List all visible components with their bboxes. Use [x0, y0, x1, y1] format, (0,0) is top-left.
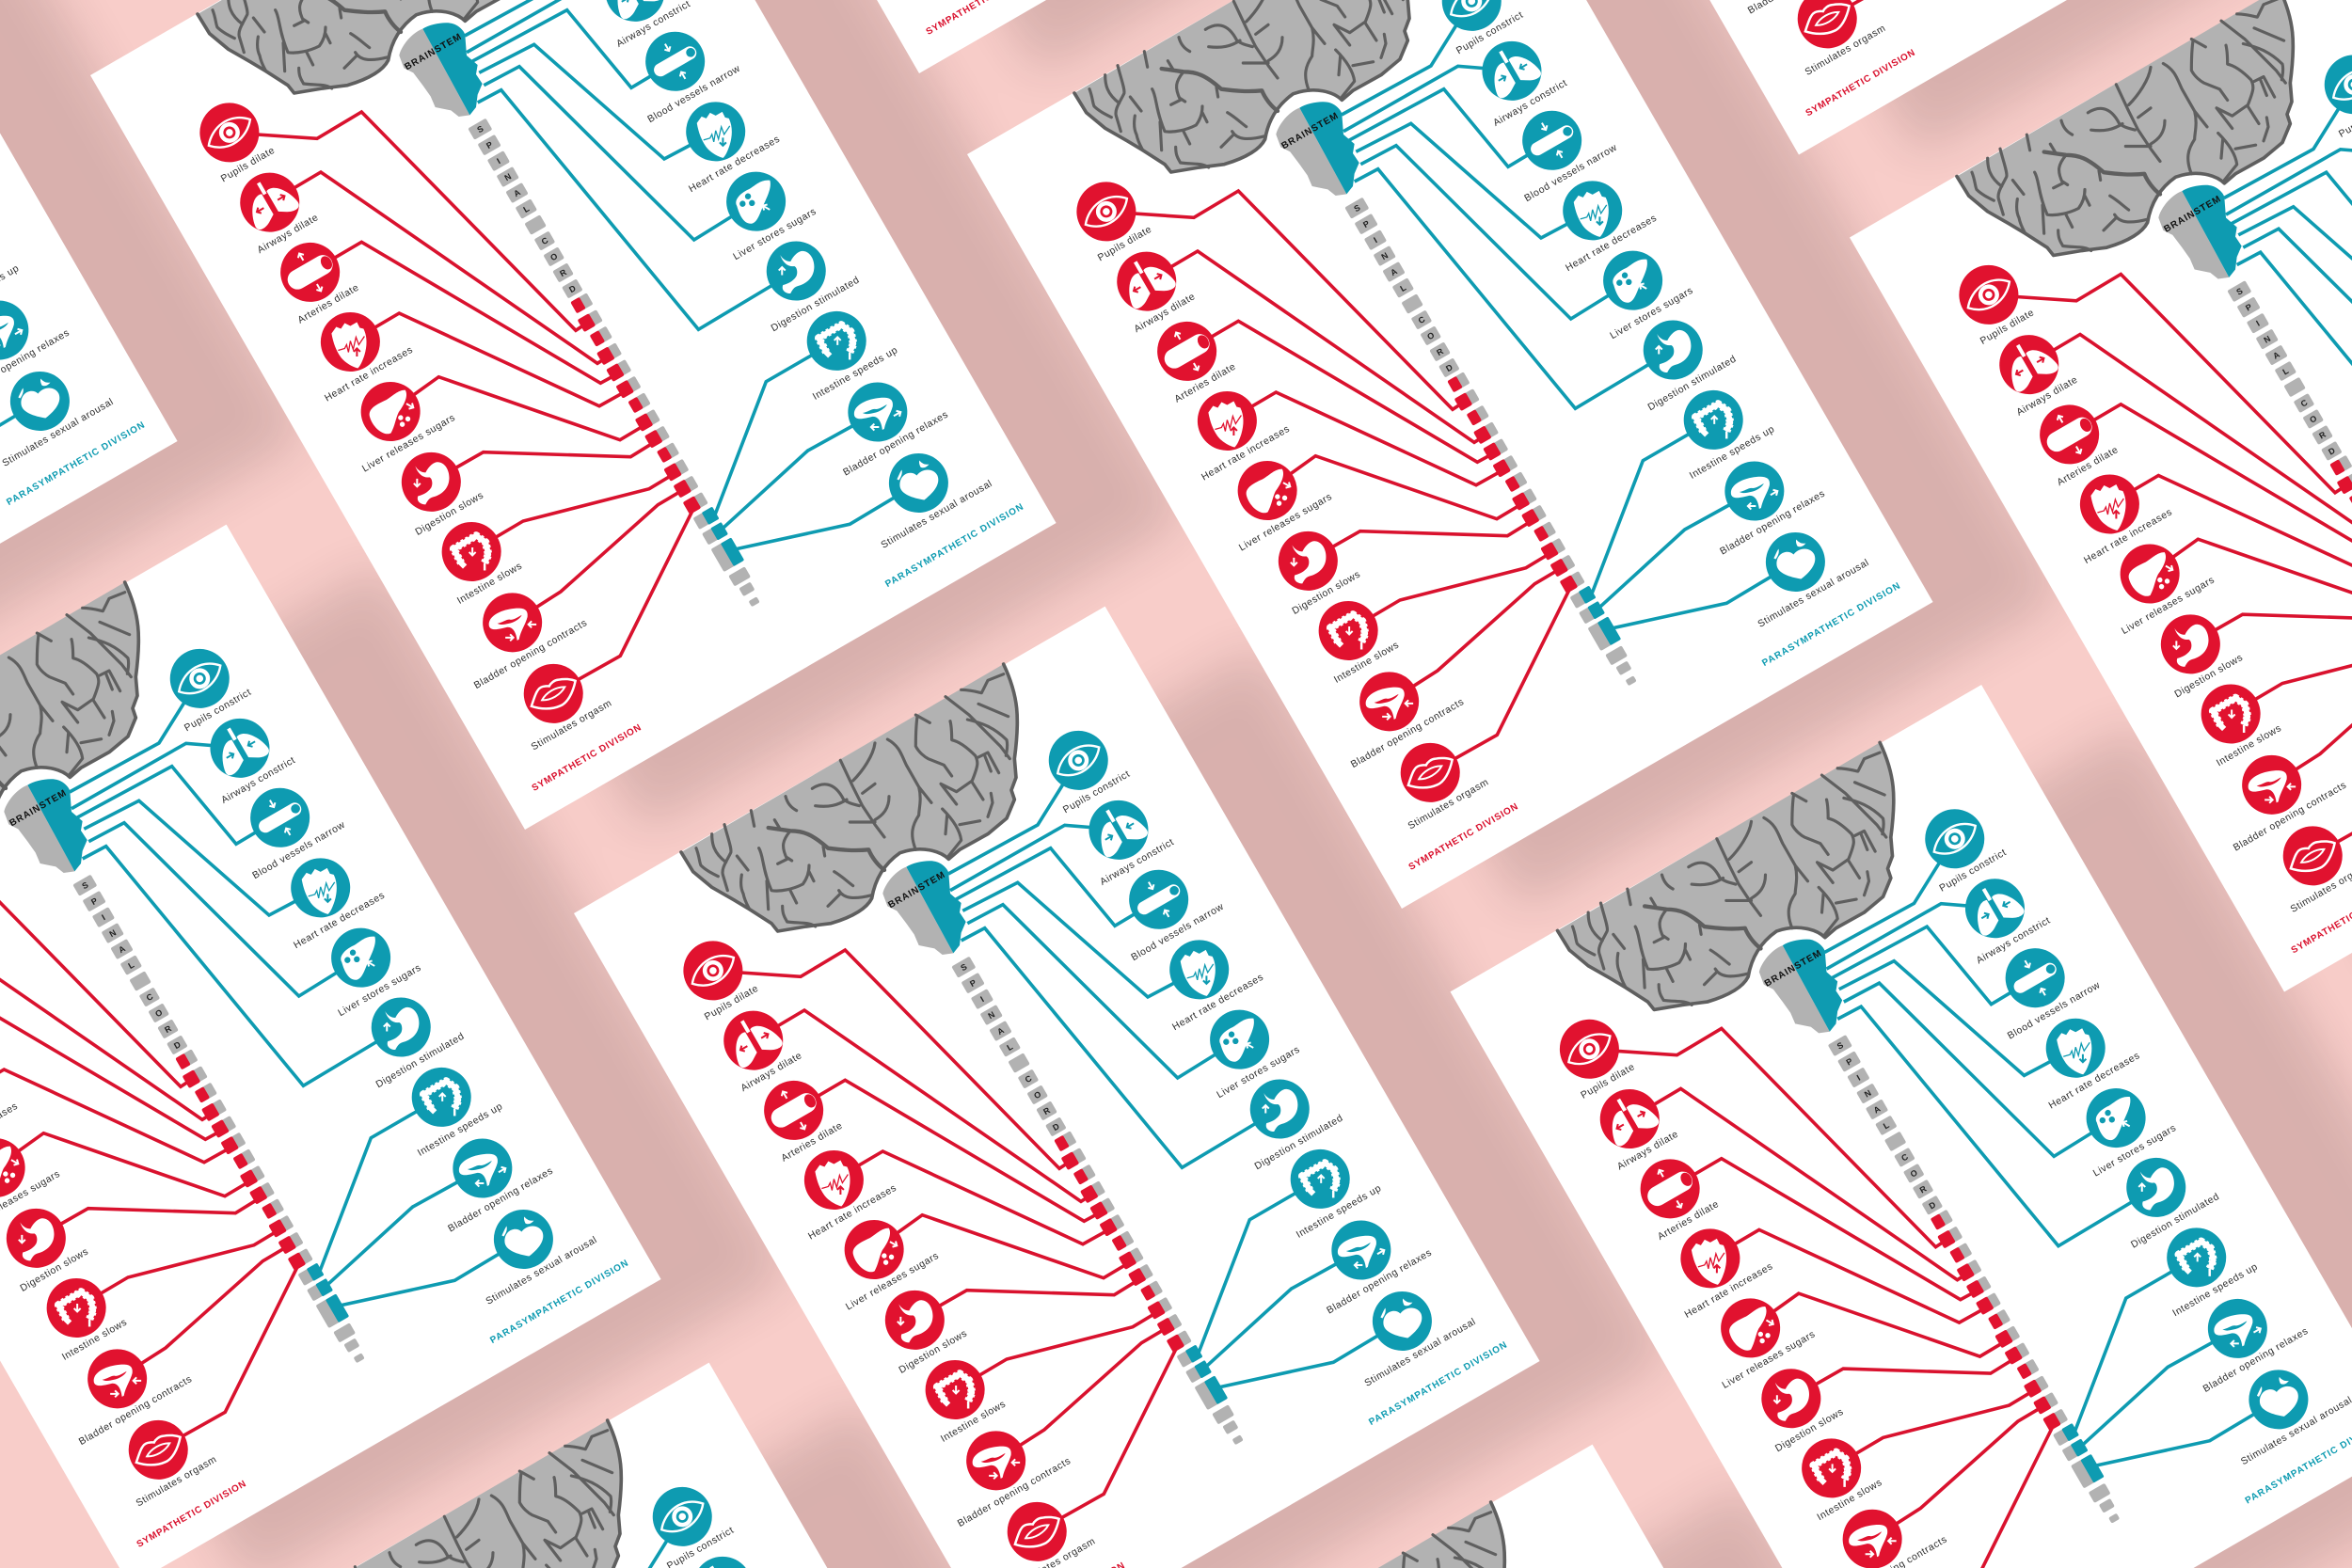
icon: heart rate increases: [793, 1139, 875, 1222]
parasympathetic labels: [1039, 755, 1478, 1389]
poster labels: Intestine slows: [60, 1316, 129, 1363]
poster labels: P: [89, 896, 99, 907]
brain illustration: [681, 664, 1017, 955]
parasympathetic heading: PARASYMPATHETIC DIVISION: [1367, 1339, 1510, 1428]
poster labels: S: [2234, 286, 2245, 297]
poster labels: Heart rate decreases: [687, 134, 782, 195]
poster labels: Digestion stimulated: [770, 275, 862, 334]
sympathetic nerve lines: [713, 950, 1180, 1531]
poster labels: R: [1918, 1183, 1929, 1195]
icon: heart rate decreases: [1159, 929, 1240, 1011]
poster labels: L: [2281, 366, 2291, 376]
poster labels: Pupils dilate: [1979, 307, 2036, 347]
poster labels: Airways constrict: [1491, 77, 1569, 129]
poster labels: A: [1872, 1103, 1883, 1116]
poster labels: Intestine speeds up: [811, 344, 900, 403]
poster labels: Intestine speeds up: [416, 1101, 505, 1159]
poster labels: Heart rate increases: [323, 344, 415, 404]
poster labels: N: [108, 927, 118, 939]
poster labels: Airways dilate: [255, 212, 321, 256]
poster labels: Arteries dilate: [1172, 361, 1238, 405]
icon: blood vessels narrow: [1119, 859, 1200, 940]
poster labels: PARASYMPATHETIC DIVISION: [5, 420, 148, 508]
poster labels: Digestion slows: [1290, 568, 1362, 617]
poster labels: S: [475, 124, 485, 135]
poster labels: Pupils dilate: [1096, 224, 1153, 263]
sympathetic labels: Airways dilate: [739, 1050, 804, 1094]
poster: top sliver: [485, 0, 1451, 73]
poster: top-left sliver: [0, 0, 178, 748]
spinal cord letters: L: [1006, 1041, 1015, 1053]
poster labels: Airways dilate: [1615, 1129, 1680, 1173]
parasympathetic labels: Blood vessels narrow: [1129, 901, 1226, 963]
poster labels: SYMPATHETIC DIVISION: [1804, 47, 1917, 119]
poster labels: S: [1352, 203, 1362, 214]
poster labels: Bladder opening contracts: [2232, 780, 2348, 853]
spinal cord letters: C: [1024, 1073, 1034, 1085]
parasympathetic labels: Bladder opening relaxes: [1325, 1246, 1434, 1316]
poster: centre labels: [670, 744, 1510, 1568]
poster labels: Digestion slows: [1773, 1406, 1846, 1454]
icon: stimulates orgasm: [996, 1491, 1077, 1568]
icon: bladder opening relaxes: [1321, 1210, 1402, 1291]
poster: lower right: [1451, 685, 2352, 1568]
icon: arteries dilate: [754, 1069, 834, 1150]
poster labels: SYMPATHETIC DIVISION: [135, 1479, 248, 1550]
poster labels: [1946, 88, 2352, 956]
poster labels: Stimulates orgasm: [135, 1453, 219, 1509]
parasympathetic labels: Liver stores sugars: [1215, 1044, 1302, 1101]
spinal cord letters: A: [995, 1025, 1006, 1037]
poster labels: Bladder opening relaxes: [1718, 487, 1827, 557]
poster labels: Digestion slows: [2172, 652, 2245, 700]
poster: centre artwork: [574, 607, 1540, 1568]
poster labels: Pupils constrict: [183, 687, 253, 734]
spinal teal segments: [1185, 1344, 1228, 1405]
parasympathetic icon column: [1038, 720, 1442, 1361]
poster labels: O: [548, 251, 559, 262]
poster labels: Liver releases sugars: [1720, 1328, 1818, 1391]
parasympathetic labels: Pupils constrict: [1061, 768, 1132, 816]
spinal red segments: [1052, 1135, 1184, 1353]
poster labels: O: [153, 1007, 164, 1019]
sympathetic labels: Digestion slows: [897, 1327, 969, 1376]
poster artwork: [1451, 685, 2352, 1568]
poster labels: P: [2244, 302, 2253, 313]
poster artwork: [178, 1363, 1144, 1568]
poster artwork: [0, 525, 661, 1568]
poster artwork: [1364, 0, 2330, 154]
parasympathetic nerve lines: [948, 760, 1403, 1387]
poster labels: Heart rate decreases: [1564, 213, 1659, 274]
poster labels: A: [1389, 266, 1399, 277]
poster labels: C: [1899, 1151, 1910, 1164]
poster artwork: [485, 0, 1451, 73]
poster labels: PARASYMPATHETIC DIVISION: [1760, 580, 1903, 669]
poster labels: Liver stores sugars: [731, 206, 818, 262]
poster labels: Digestion stimulated: [2129, 1191, 2221, 1251]
poster labels: L: [1882, 1120, 1891, 1131]
poster labels: Pupils dilate: [1579, 1061, 1637, 1101]
poster labels: C: [540, 235, 550, 246]
poster labels: N: [1863, 1088, 1873, 1100]
poster labels: Intestine speeds up: [1688, 423, 1777, 482]
icon: intestine speeds up: [1279, 1138, 1360, 1219]
parasympathetic labels: Stimulates sexual arousal: [1362, 1316, 1478, 1389]
poster labels: Bladder opening relaxes: [2201, 1325, 2311, 1395]
parasympathetic labels: Heart rate decreases: [1170, 972, 1265, 1033]
spinal cord letters: P: [968, 978, 977, 989]
poster labels: Blood vessels narrow: [645, 63, 742, 125]
poster labels: Airways dilate: [2014, 374, 2080, 419]
poster labels: [0, 247, 148, 508]
poster artwork: [1850, 0, 2352, 991]
poster labels: Bladder opening contracts: [77, 1373, 194, 1448]
poster labels: D: [1444, 362, 1454, 373]
poster labels: Digestion stimulated: [1646, 354, 1739, 413]
spinal cord letters: O: [1032, 1089, 1042, 1101]
poster labels: Digestion slows: [18, 1245, 90, 1294]
icon: pupils constrict: [1038, 720, 1119, 800]
poster labels: Intestine slows: [2215, 722, 2283, 768]
poster labels: BRAINSTEM: [403, 32, 464, 72]
poster: bottom left: [178, 1363, 1144, 1568]
poster labels: N: [2263, 334, 2272, 345]
poster labels: PARASYMPATHETIC DIVISION: [883, 501, 1026, 590]
spinal cord letters: D: [1051, 1121, 1061, 1132]
poster labels: Arteries dilate: [1656, 1198, 1721, 1243]
poster labels: Liver releases sugars: [2120, 574, 2217, 637]
poster labels: L: [1399, 282, 1408, 293]
poster labels: I: [495, 156, 502, 166]
icon: airways constrict: [1078, 789, 1159, 870]
poster labels: Pupils constrict: [1454, 9, 1525, 56]
poster labels: Bladder opening relaxes: [446, 1164, 555, 1234]
parasympathetic labels: Airways constrict: [1098, 836, 1176, 888]
poster labels: SYMPATHETIC DIVISION: [1407, 801, 1520, 873]
parasympathetic labels: Digestion stimulated: [1253, 1113, 1345, 1172]
poster labels: Airways constrict: [219, 754, 297, 806]
spinal cord letters: [959, 961, 1061, 1132]
sympathetic labels: Bladder opening contracts: [956, 1455, 1073, 1529]
poster labels: L: [522, 203, 532, 214]
sympathetic labels: Liver releases sugars: [844, 1250, 941, 1313]
poster labels: R: [1435, 346, 1445, 357]
sympathetic labels: Heart rate increases: [806, 1182, 898, 1242]
poster sheet: [574, 607, 1540, 1568]
poster labels: C: [1417, 314, 1427, 325]
poster labels: D: [2327, 445, 2337, 457]
poster labels: R: [2317, 429, 2328, 441]
poster artwork: [90, 0, 1057, 830]
poster labels: Heart rate increases: [2082, 506, 2174, 566]
poster labels: BRAINSTEM: [1763, 948, 1824, 990]
parasympathetic labels: Intestine speeds up: [1295, 1182, 1384, 1241]
rotated poster frame contents: [673, 720, 1442, 1568]
poster labels: Blood vessels narrow: [1522, 142, 1619, 204]
poster labels: D: [1928, 1199, 1938, 1211]
poster labels: [1548, 822, 2352, 1568]
poster labels: Intestine slows: [1815, 1477, 1884, 1523]
poster labels: Stimulates orgasm: [1804, 23, 1888, 78]
poster labels: [186, 0, 1026, 794]
poster labels: Stimulates orgasm: [1406, 776, 1491, 832]
poster labels: P: [1361, 219, 1371, 230]
poster labels: Bladder opening relaxes: [841, 408, 950, 478]
poster labels: O: [1909, 1167, 1919, 1180]
poster labels: Blood vessels narrow: [250, 819, 347, 881]
poster labels: BRAINSTEM: [8, 788, 69, 829]
poster: upper middle: [967, 0, 1933, 909]
icon: digestion slows: [874, 1279, 955, 1360]
poster labels: A: [117, 943, 127, 955]
poster labels: Airways dilate: [1132, 291, 1198, 335]
spinal cord letters: I: [978, 994, 986, 1004]
poster labels: Intestine speeds up: [2170, 1261, 2260, 1319]
sympathetic labels: [673, 966, 1114, 1568]
icon: airways dilate: [713, 1000, 794, 1081]
poster labels: Liver releases sugars: [1237, 491, 1334, 554]
poster labels: I: [100, 912, 107, 922]
poster labels: L: [127, 959, 136, 971]
spinal cord segments: [951, 956, 1249, 1449]
icon: bladder opening contracts: [956, 1420, 1037, 1501]
poster labels: [1745, 0, 1922, 119]
poster labels: Pupils dilate: [219, 145, 277, 184]
poster: top right sliver: [1364, 0, 2330, 154]
poster artwork: [1061, 1445, 2027, 1568]
icon: pupils dilate: [673, 930, 754, 1011]
icon: liver stores sugars: [1200, 999, 1280, 1080]
poster artwork: [967, 0, 1933, 909]
poster labels: Intestine slows: [1332, 639, 1401, 686]
poster labels: Liver stores sugars: [336, 962, 423, 1019]
icon: digestion stimulated: [1239, 1069, 1320, 1149]
poster labels: P: [485, 140, 494, 150]
poster artwork: [0, 0, 178, 748]
poster labels: Bladder opening contracts: [472, 617, 589, 691]
poster: far right: [1850, 0, 2352, 991]
poster labels: Stimulates orgasm: [530, 697, 614, 752]
poster labels: N: [503, 171, 513, 182]
poster labels: PARASYMPATHETIC DIVISION: [488, 1258, 631, 1346]
poster labels: Stimulates sexual arousal: [0, 396, 116, 469]
poster labels: [1063, 0, 1903, 873]
poster labels: A: [2271, 350, 2281, 361]
poster labels: I: [2254, 319, 2262, 328]
spinal cord letters: S: [959, 962, 969, 973]
poster: left: [0, 525, 661, 1568]
poster labels: Heart rate increases: [1682, 1260, 1775, 1321]
poster labels: Digestion stimulated: [374, 1031, 467, 1090]
poster labels: BRAINSTEM: [1279, 111, 1341, 151]
poster labels: Stimulates sexual arousal: [879, 478, 994, 551]
poster labels: R: [558, 267, 568, 278]
poster labels: D: [172, 1039, 183, 1051]
sympathetic labels: Arteries dilate: [779, 1120, 845, 1164]
poster labels: [0, 662, 631, 1550]
poster labels: Arteries dilate: [295, 282, 361, 326]
poster labels: N: [1380, 250, 1390, 261]
poster labels: Heart rate decreases: [2046, 1050, 2142, 1112]
icon: stimulates sexual arousal: [1361, 1280, 1442, 1361]
poster: bottom centre: [1061, 1445, 2027, 1568]
brainstem label: BRAINSTEM: [886, 870, 947, 911]
poster labels: R: [163, 1023, 173, 1035]
icon: liver releases sugars: [834, 1209, 914, 1291]
poster labels: Intestine slows: [455, 560, 524, 607]
poster labels: Liver stores sugars: [1608, 285, 1695, 341]
sympathetic icon column: [673, 930, 1077, 1568]
poster labels: Liver releases sugars: [360, 412, 457, 475]
poster labels: SYMPATHETIC DIVISION: [531, 722, 644, 794]
poster labels: Arteries dilate: [2055, 444, 2121, 488]
poster labels: Pupils constrict: [1937, 847, 2009, 895]
poster labels: Airways constrict: [1975, 914, 2053, 966]
poster labels: Stimulates sexual arousal: [1756, 557, 1871, 630]
poster labels: A: [512, 187, 522, 198]
poster labels: I: [1372, 235, 1379, 245]
poster labels: Stimulates sexual arousal: [2239, 1394, 2352, 1467]
icon: intestine slows: [914, 1349, 995, 1431]
poster labels: Liver stores sugars: [2091, 1122, 2179, 1180]
poster labels: BRAINSTEM: [2162, 194, 2223, 235]
spinal cord letters: R: [1041, 1105, 1052, 1117]
poster labels: I: [1855, 1073, 1862, 1083]
poster labels: C: [145, 991, 155, 1003]
poster labels: Heart rate decreases: [292, 890, 387, 951]
poster labels: D: [567, 283, 578, 294]
poster labels: Blood vessels narrow: [2006, 979, 2103, 1041]
poster labels: Digestion slows: [413, 489, 485, 538]
brainstem: [882, 861, 966, 955]
poster labels: O: [1425, 330, 1436, 341]
poster labels: P: [1845, 1056, 1854, 1068]
spinal cord letters: N: [987, 1009, 996, 1021]
poster labels: S: [80, 880, 90, 891]
sympathetic labels: Intestine slows: [939, 1398, 1008, 1445]
poster labels: S: [1836, 1040, 1845, 1052]
sympathetic labels: Pupils dilate: [703, 983, 760, 1022]
poster labels: Heart rate increases: [1200, 423, 1292, 483]
poster: upper left: [90, 0, 1057, 830]
poster labels: O: [2308, 414, 2318, 425]
poster labels: Stimulates sexual arousal: [484, 1234, 599, 1307]
poster labels: C: [2299, 397, 2310, 409]
poster labels: Bladder opening contracts: [1349, 696, 1466, 770]
